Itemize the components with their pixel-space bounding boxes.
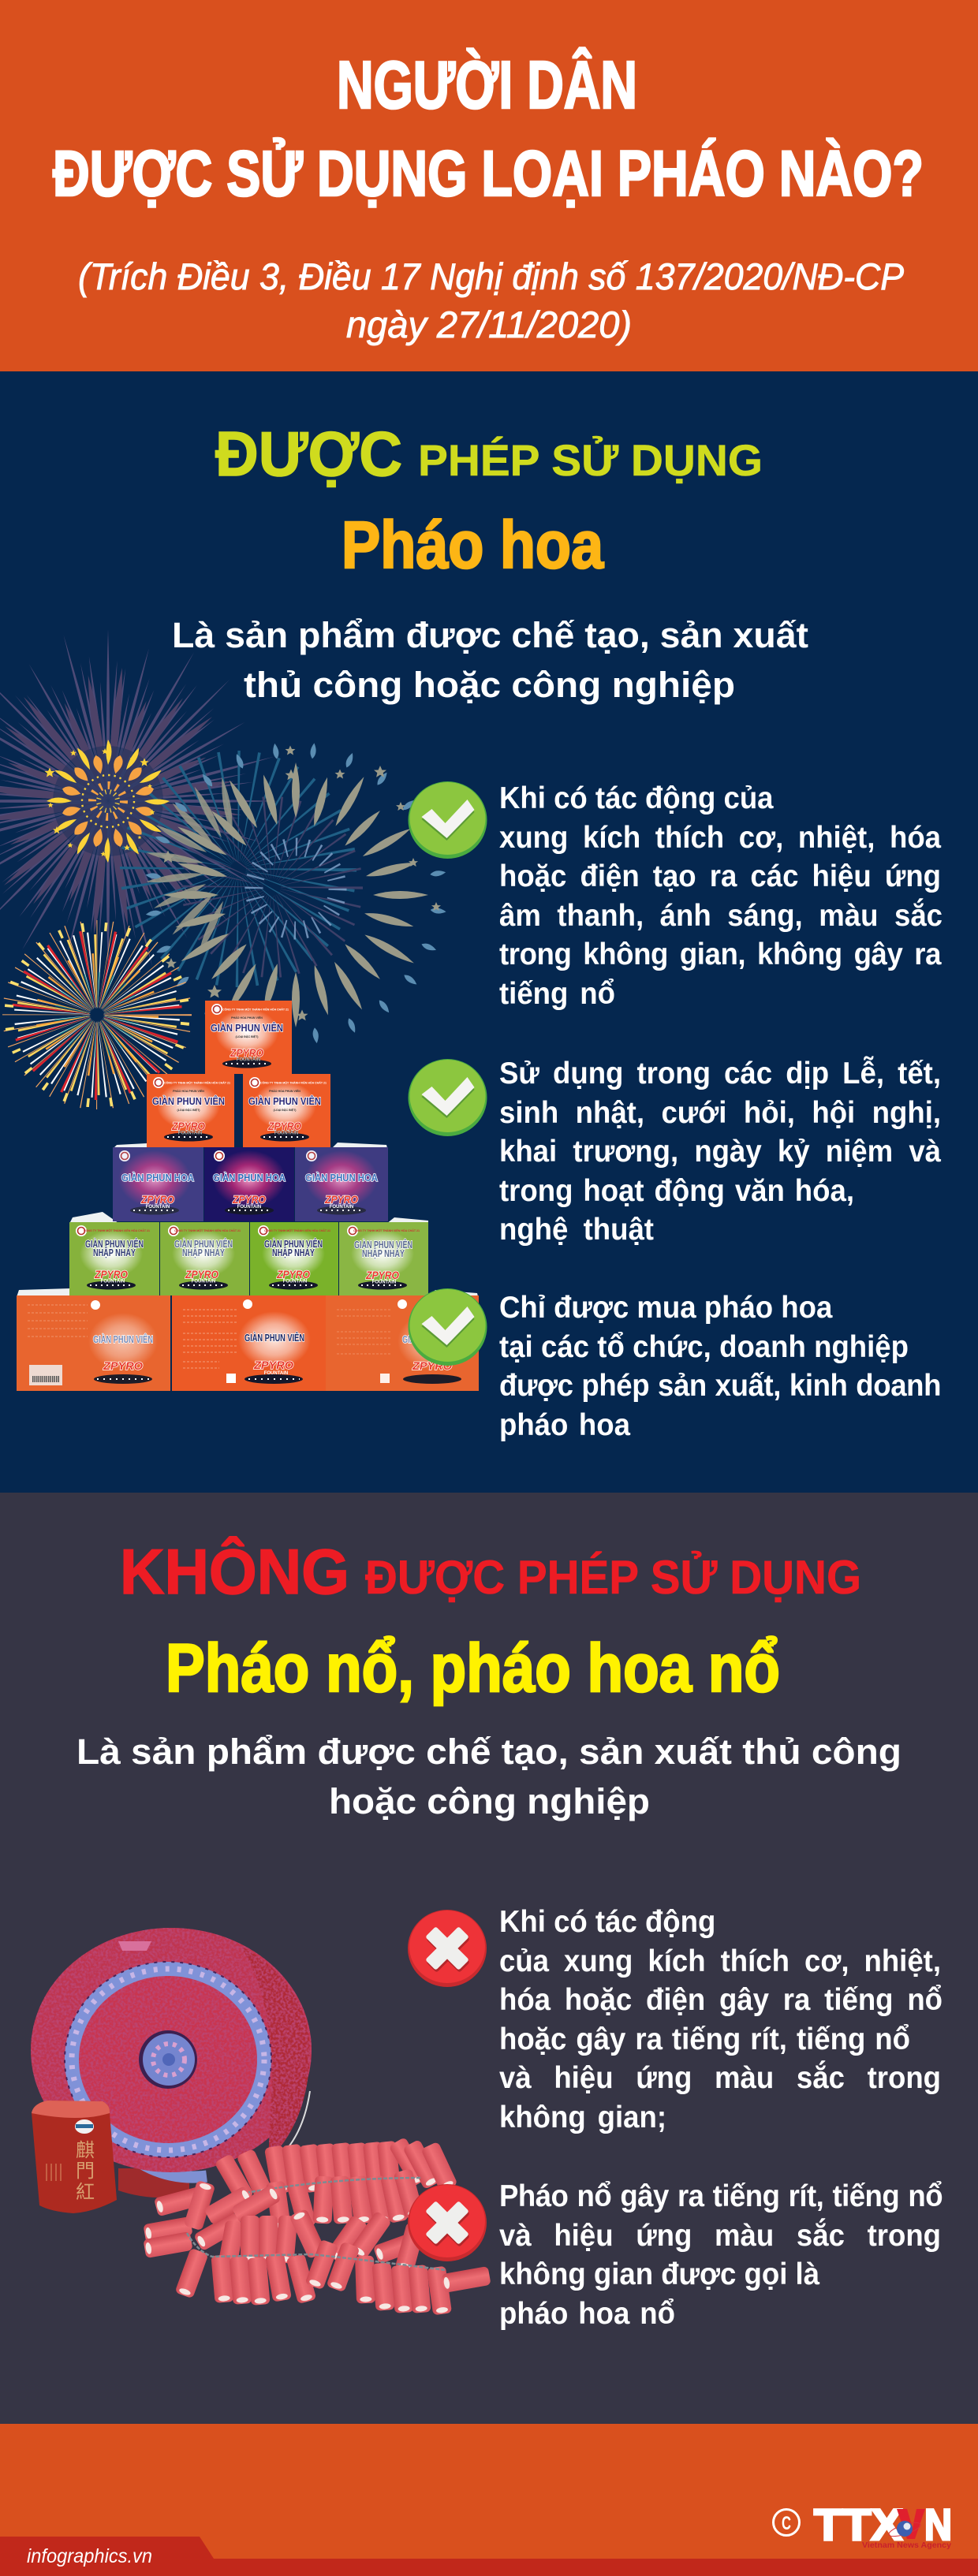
box: top: (LOẠI ĐẶC BIỆT) (236, 1035, 259, 1038)
text: effects of fireworks: âm thanh, ánh sáng, màu sắc (499, 899, 943, 933)
logo: TTXVN (814, 2500, 952, 2550)
box: large orange centre (172, 1295, 326, 1391)
subtitle: legal source: (Trích Điều 3, Điều 17 Nghị định số 137/2020/NĐ-CP (78, 255, 905, 297)
text: where to buy: Chỉ được mua pháo hoa (499, 1291, 832, 1325)
box: top: CÔNG TY TNHH MỘT THÀNH VIÊN HÓA CHẤT 21 (222, 1008, 289, 1011)
title (53, 47, 924, 210)
illustration: dark purple firework (0, 616, 293, 986)
box: green four: NHẬP NHÁY (362, 1247, 405, 1259)
heading: prohibited (120, 1536, 861, 1608)
illustration: yellow and orange firework (44, 740, 170, 863)
text: effects of firecrackers: và hiệu ứng màu sắc trong (499, 2061, 941, 2095)
subtitle: legal source: ngày 27/11/2020) (346, 304, 632, 345)
text: where to buy: pháo hoa (499, 1408, 630, 1442)
source: infographics.vn: infographics.vn (27, 2545, 152, 2567)
text: occasions of use (499, 1056, 942, 1247)
box: purple centre: FOUNTAIN (237, 1205, 261, 1210)
box: top (205, 1001, 292, 1074)
illustration: cake firework box: 紅 (76, 2182, 95, 2203)
box: green four: CÔNG TY TNHH MỘT THÀNH VIÊN HÓA CHẤT 21 (353, 1228, 420, 1232)
box: second row left: CÔNG TY TNHH MỘT THÀNH VIÊN HÓA CHẤT 21 (164, 1080, 230, 1085)
box: second row right: ZPYRO (267, 1120, 301, 1132)
text: definition of explosive fireworks: và hiệu ứng màu sắc trong (499, 2219, 941, 2253)
panel: prohibited fireworks (0, 1493, 978, 2424)
text: effects of firecrackers: hoặc gây ra tiếng rít, tiếng nổ (499, 2022, 910, 2056)
text: effects of firecrackers: không gian; (499, 2101, 666, 2134)
box: green four: GIÀN PHUN VIÊN (354, 1239, 412, 1251)
box: green four: ZPYRO (365, 1269, 399, 1281)
box: green one: CÔNG TY TNHH MỘT THÀNH VIÊN HÓA CHẤT 21 (84, 1228, 150, 1232)
illustration: firecracker string (143, 2137, 491, 2315)
panel: permitted fireworks (0, 371, 978, 1493)
box: purple centre: ZPYRO (232, 1193, 266, 1206)
text: occasions of use: khai trương, ngày kỷ niệm và (499, 1135, 941, 1169)
subtitle: legal source (78, 255, 905, 345)
text: effects of firecrackers (499, 1905, 943, 2134)
box: purple centre (204, 1147, 294, 1221)
box: purple right (295, 1147, 388, 1221)
text: effects of fireworks: Khi có tác động của (499, 781, 774, 815)
text: occasions of use: Sử dụng trong các dịp Lễ, tết, (499, 1057, 941, 1090)
box: green three: GIÀN PHUN VIÊN (264, 1238, 323, 1250)
box: purple right: ZPYRO (324, 1193, 358, 1206)
text: where to buy: tại các tổ chức, doanh nghiệp (499, 1330, 909, 1364)
heading: firecrackers: Pháo nổ, pháo hoa nổ (166, 1631, 780, 1706)
logo: TTXVN: TTX (814, 2500, 902, 2549)
heading: permitted (215, 419, 763, 489)
box: green two (160, 1222, 249, 1295)
box: second row right: GIÀN PHUN VIÊN (248, 1095, 321, 1107)
text: effects of fireworks: trong không gian, không gây ra (499, 938, 941, 971)
box: second row right (243, 1074, 330, 1147)
box: top: ZPYRO (230, 1046, 263, 1059)
icon: check three (409, 1288, 487, 1366)
box: second row right: PHÁO HOA PHUN VIÊN (269, 1089, 300, 1093)
box: large orange centre: ZPYRO (253, 1359, 293, 1371)
box: large orange right (326, 1295, 479, 1391)
logo: TTXVN: N (924, 2500, 952, 2549)
heading: prohibited: ĐƯỢC PHÉP SỬ DỤNG (365, 1551, 861, 1604)
box: green three: CÔNG TY TNHH MỘT THÀNH VIÊN HÓA CHẤT 21 (264, 1228, 330, 1232)
box: green two: ZPYRO (185, 1268, 218, 1281)
box: second row left: ZPYRO (171, 1120, 205, 1132)
box: green three (250, 1222, 338, 1295)
heading: permitted: ĐƯỢC (215, 419, 402, 489)
box: purple left: ZPYRO (140, 1193, 174, 1206)
text: occasions of use: nghệ thuật (499, 1213, 654, 1247)
box: purple centre: GIÀN PHUN HOA (213, 1172, 286, 1184)
box: green one: NHẬP NHÁY (93, 1247, 136, 1258)
box: large orange centre: FOUNTAIN (264, 1371, 288, 1376)
box: purple left: GIÀN PHUN HOA (121, 1172, 195, 1184)
box: second row right: CÔNG TY TNHH MỘT THÀNH VIÊN HÓA CHẤT 21 (260, 1080, 327, 1085)
box: green two: FOUNTAIN (192, 1279, 215, 1284)
panel: header (0, 0, 978, 371)
icon: check one (409, 781, 487, 859)
box: green one (69, 1222, 159, 1295)
heading: permitted: PHÉP SỬ DỤNG (418, 435, 763, 485)
text: occasions of use: trong hoạt động văn hóa, (499, 1174, 854, 1208)
plastic wrap highlights (17, 1143, 479, 1299)
box: green two: NHẬP NHÁY (182, 1247, 225, 1258)
icon: cross two (408, 2184, 487, 2261)
box: purple right: GIÀN PHUN HOA (305, 1172, 379, 1184)
illustration: firecracker wheel (31, 1928, 312, 2198)
box: purple right: FOUNTAIN (330, 1205, 353, 1210)
box: green four: FOUNTAIN (372, 1281, 396, 1285)
box: green three: FOUNTAIN (283, 1279, 307, 1284)
box: large orange left: ZPYRO (103, 1359, 143, 1372)
box: second row left (147, 1074, 234, 1147)
box: green one: GIÀN PHUN VIÊN (85, 1238, 144, 1250)
box: large orange left: GIÀN PHUN VIÊN (93, 1333, 153, 1345)
text: definition of explosive fireworks: không gian được gọi là (499, 2257, 819, 2291)
box: second row left: FOUNTAIN (178, 1131, 202, 1135)
box: green three: ZPYRO (276, 1268, 310, 1281)
text: where to buy: được phép sản xuất, kinh doanh (499, 1369, 941, 1403)
icon: copyright (773, 2509, 800, 2536)
illustration: cake firework box: 麒 (76, 2140, 95, 2161)
box: second row right: (LOẠI ĐẶC BIỆT) (274, 1108, 297, 1112)
text: occasions of use: sinh nhật, cưới hỏi, hội nghị, (499, 1096, 941, 1130)
definition text: Là sản phẩm được chế tạo, sản xuất (172, 615, 808, 655)
box: top: FOUNTAIN (237, 1058, 260, 1063)
text: effects of firecrackers: của xung kích thích cơ, nhiệt, (499, 1944, 941, 1978)
icon: cross one (408, 1910, 487, 1987)
box: green two: GIÀN PHUN VIÊN (174, 1238, 233, 1250)
box: green two: CÔNG TY TNHH MỘT THÀNH VIÊN HÓA CHẤT 21 (174, 1228, 241, 1232)
heading: prohibited: KHÔNG (120, 1536, 349, 1608)
logo: TTXVN: Vietnam News Agency (862, 2541, 951, 2550)
text: definition of explosive fireworks (499, 2179, 943, 2331)
definition text: Là sản phẩm được chế tạo, sản xuất thủ công (77, 1732, 901, 1772)
text: effects of fireworks (499, 781, 943, 1011)
definition text: hoặc công nghiệp (329, 1781, 650, 1821)
box: green one: ZPYRO (94, 1268, 128, 1281)
box: second row left: PHÁO HOA PHUN VIÊN (173, 1089, 204, 1093)
title: NGƯỜI DÂN (337, 47, 637, 123)
footer band (0, 2537, 978, 2576)
definition text (77, 1732, 901, 1821)
box: green one: FOUNTAIN (101, 1279, 125, 1284)
box: second row left: GIÀN PHUN VIÊN (152, 1095, 225, 1107)
box: second row left: (LOẠI ĐẶC BIỆT) (177, 1108, 200, 1112)
text: definition of explosive fireworks: Pháo nổ gây ra tiếng rít, tiếng nổ (499, 2179, 943, 2213)
box: green three: NHẬP NHÁY (272, 1247, 315, 1258)
text: effects of fireworks: tiếng nổ (499, 977, 615, 1011)
box: top: GIÀN PHUN VIÊN (211, 1022, 283, 1034)
text: definition of explosive fireworks: pháo hoa nổ (499, 2297, 675, 2331)
definition text: thủ công hoặc công nghiệp (244, 665, 735, 705)
icon: check two (409, 1059, 487, 1136)
illustration: cake firework box (32, 2101, 117, 2213)
box: top: PHÁO HOA PHUN VIÊN (231, 1016, 263, 1020)
text: effects of fireworks: hoặc điện tạo ra các hiệu ứng (499, 859, 941, 893)
icon: copyright: C (782, 2513, 791, 2534)
panel: footer (0, 2424, 978, 2576)
heading: firework: Pháo hoa (342, 508, 604, 582)
box: purple left: FOUNTAIN (146, 1205, 170, 1210)
text: effects of firecrackers: hóa hoặc điện gây ra tiếng nổ (499, 1983, 943, 2017)
illustration: multicolour firework (2, 919, 192, 1110)
illustration: cake firework box: 門 (76, 2160, 95, 2182)
box: large orange right: GIÀN PHUN VIÊN (402, 1333, 462, 1345)
illustration: blue and tan firework (127, 725, 465, 1062)
box: large orange centre: GIÀN PHUN VIÊN (244, 1332, 304, 1344)
box: purple left (113, 1147, 203, 1221)
text: effects of firecrackers: Khi có tác động (499, 1905, 715, 1939)
definition text (172, 615, 808, 705)
text: where to buy (499, 1291, 941, 1442)
box: green four (339, 1222, 428, 1295)
box: second row right: FOUNTAIN (274, 1131, 298, 1135)
text: effects of fireworks: xung kích thích cơ, nhiệt, hóa (499, 821, 941, 855)
box: large orange left (17, 1295, 170, 1391)
box: large orange right: ZPYRO (412, 1359, 452, 1372)
illustration: stacked firework boxes (17, 1001, 479, 1391)
